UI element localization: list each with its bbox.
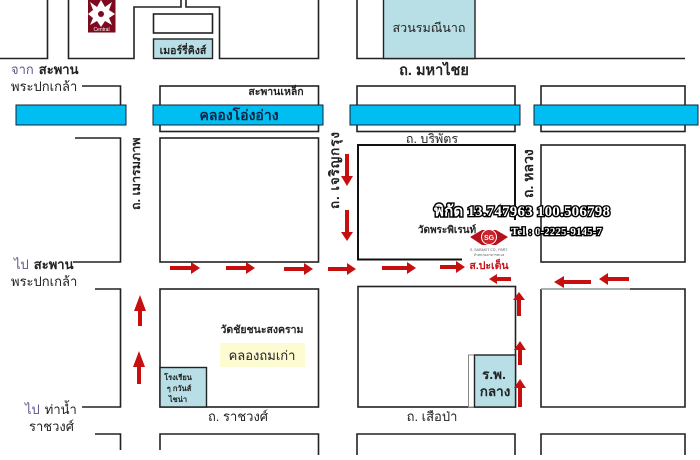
label: to Ratchawong pier xyxy=(24,400,77,434)
building: Klang Hospital xyxy=(468,355,516,407)
label: from Phra Pok Klao bridge xyxy=(11,62,79,94)
building: Klang Hospital: ร.พ. xyxy=(482,367,506,382)
unlabeled white building xyxy=(154,14,212,33)
arrow: Worachak north 1 xyxy=(134,295,146,326)
canal: Khlong Ong Ang: คลองโอ่งอ่าง xyxy=(199,106,279,123)
icon: S.Pakkhin company logo: ส.ปะเต็น xyxy=(469,258,509,272)
arrow: east 1 xyxy=(170,262,200,274)
arrow: east 3 xyxy=(284,263,313,275)
arrow: west short xyxy=(489,274,511,284)
road label: Charoen Krung: ถ. เจริญกรุง xyxy=(327,132,343,209)
icon: S.Pakkhin company logo: จำหน่ายอาหารทะเล xyxy=(474,253,504,257)
road label: Boriphat: ถ. บริพัตร xyxy=(406,132,458,146)
arrow: west 2 xyxy=(599,273,629,285)
arrow: east 4 xyxy=(328,263,356,275)
building: Chinese school: โรงเรียน xyxy=(163,372,193,382)
label: from Phra Pok Klao bridge: พระปกเกล้า xyxy=(11,79,77,94)
label: to Phra Pok Klao bridge: ไป สะพาน xyxy=(13,257,74,272)
building: Chinese school: ๆ กวันส์ xyxy=(167,384,192,393)
park: Suan Rommaninat: สวนรมณีนาถ xyxy=(393,21,465,35)
arrow: Charoen Krung south 1 xyxy=(341,154,353,186)
icon: Central logo xyxy=(88,0,116,33)
label: to Ratchawong pier: ราชวงศ์ xyxy=(29,419,75,434)
building: Mercy King: เมอร์รี่คิงส์ xyxy=(160,42,207,57)
label: from Phra Pok Klao bridge: จาก สะพาน xyxy=(11,62,79,77)
arrow: east 5 xyxy=(382,262,416,274)
label: to Phra Pok Klao bridge xyxy=(11,257,77,289)
icon: Central logo: Central xyxy=(93,27,110,33)
road label: Luang: ถ. หลวง xyxy=(520,149,536,198)
label: to Ratchawong pier: ไป ท่าน้ำ xyxy=(24,400,77,417)
road label: Worachak: ถ. เมารมภาพ xyxy=(129,138,143,210)
label: iron bridge: สะพานเหล็ก xyxy=(248,84,304,98)
area: Khlong Thom Kao: คลองถมเก่า xyxy=(229,348,295,363)
arrow: east 2 xyxy=(226,262,255,274)
area: Khlong Thom Kao xyxy=(220,343,305,367)
building: Klang Hospital: กลาง xyxy=(480,384,510,399)
canal: Khlong Ong Ang xyxy=(16,105,698,125)
road label: Suea Pa: ถ. เสือป่า xyxy=(407,409,457,424)
telephone callout: Tel : 0-2225-9145-7 xyxy=(511,226,602,238)
route arrows xyxy=(133,154,629,407)
arrow: Charoen Krung south 2 xyxy=(341,210,353,241)
building: Chinese school xyxy=(160,368,206,407)
building: Mercy King xyxy=(154,39,212,58)
arrow: east 6 xyxy=(440,261,465,273)
label: Wat Chai Chana Songkhram: วัดชัยชนะสงคราม xyxy=(221,324,304,336)
building: Chinese school: ไชน่า xyxy=(168,394,187,404)
label: Wat Phra Phiren: วัดพระพิเรนท์ xyxy=(418,224,477,236)
road label: Ratchawong: ถ. ราชวงศ์ xyxy=(208,409,269,424)
park: Suan Rommaninat xyxy=(384,0,475,58)
road label: Maha Chai: ถ. มหาไชย xyxy=(399,61,469,79)
icon: S.Pakkhin company logo: S. SARAKIT CO., PART. xyxy=(470,248,508,252)
arrow: Worachak north 2 xyxy=(133,351,145,384)
arrow: north 3 xyxy=(514,379,526,407)
arrow: west 1 xyxy=(554,276,591,288)
icon: S.Pakkhin company logo xyxy=(469,230,509,272)
label: to Phra Pok Klao bridge: พระปกเกล้า xyxy=(11,274,77,289)
arrow: north 1 xyxy=(513,292,525,316)
coordinates callout: พิกัด 13.747963 100.506798 xyxy=(434,202,610,220)
arrow: north 2 xyxy=(514,341,526,365)
icon: S.Pakkhin company logo: SG xyxy=(484,235,495,242)
